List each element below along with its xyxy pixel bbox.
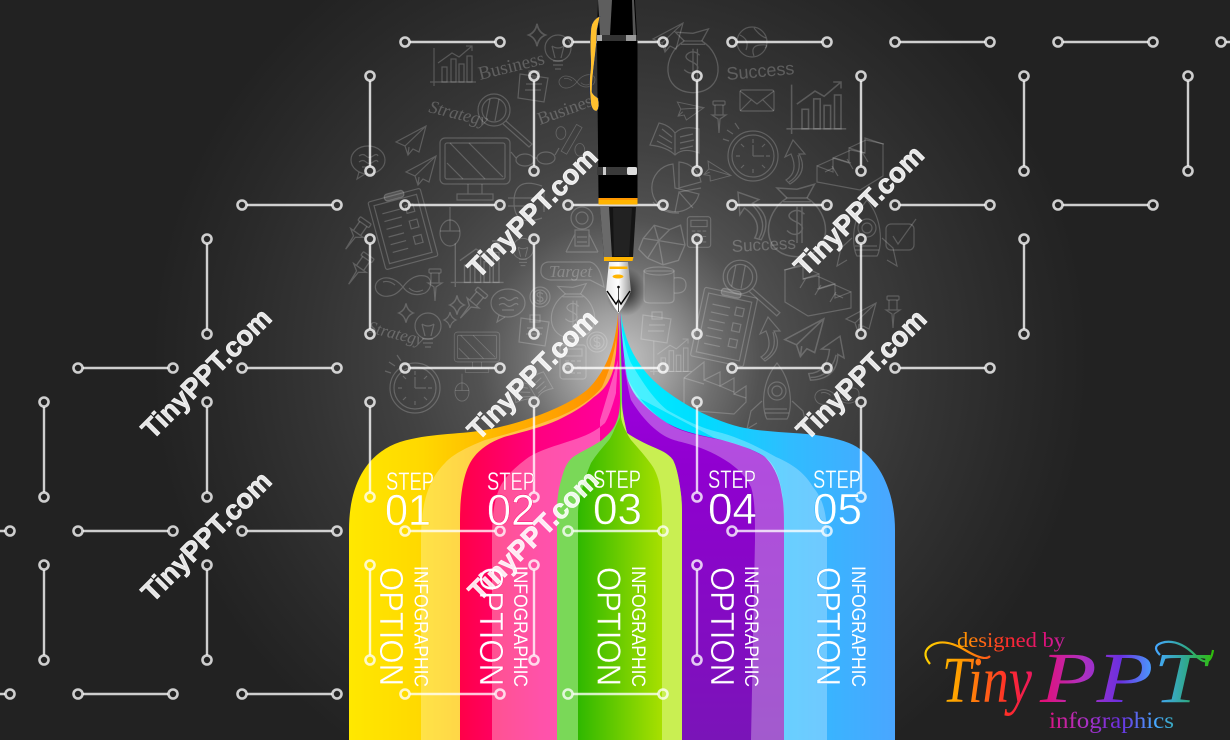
- watermarks: TinyPPT.com: [135, 302, 278, 445]
- pen grip: [600, 207, 636, 257]
- doodle sketch icons: Business: [476, 48, 547, 85]
- pen barrel: [597, 41, 638, 198]
- option 02 text: INFOGRAPHIC: [509, 566, 531, 687]
- option 01 text: [373, 566, 432, 687]
- barrel ring: [597, 167, 637, 175]
- watermarks: TinyPPT.com: [461, 303, 604, 446]
- step 05 label: STEP: [813, 466, 861, 494]
- gold band: [598, 198, 638, 204]
- step 01 label: 01: [385, 486, 431, 535]
- option 05 text: [810, 566, 869, 687]
- option 03 text: OPTION: [590, 567, 628, 686]
- step 04 label: STEP: [708, 466, 756, 494]
- green right highlight: [621, 400, 682, 740]
- option 04 text: [704, 566, 762, 687]
- pen cap top: [597, 0, 637, 35]
- step 05 label: 05: [813, 485, 862, 534]
- option 03 text: INFOGRAPHIC: [627, 566, 649, 687]
- gold ring: [604, 257, 634, 261]
- step 03 label: STEP: [593, 466, 641, 494]
- band: step 05 blue: [621, 313, 895, 740]
- option 02 text: [473, 566, 531, 687]
- option 04 text: INFOGRAPHIC: [740, 566, 762, 687]
- logo: designed by TinyPPT infographics: [925, 628, 1213, 733]
- watermarks: TinyPPT.com: [461, 141, 604, 284]
- logo: designed by TinyPPT infographics: designed by: [957, 628, 1066, 652]
- rainbow ink bands: [349, 313, 895, 740]
- doodle sketch icons: [339, 23, 916, 429]
- logo flourishes: [925, 642, 1213, 664]
- option 01 text: OPTION: [373, 567, 410, 686]
- watermarks: TinyPPT.com: [787, 139, 930, 282]
- logo: designed by TinyPPT infographics: PPT: [1039, 638, 1211, 718]
- light overlay: purple: [622, 350, 784, 740]
- doodle sketch icons: Target: [549, 262, 593, 281]
- doodle sketch icons: Strategy: [366, 317, 426, 350]
- band: step 03 green: [557, 313, 682, 740]
- option 05 text: OPTION: [810, 567, 847, 686]
- light overlay: blue: [622, 330, 827, 740]
- watermarks: TinyPPT.com: [462, 464, 605, 607]
- band: step 02 pink: [460, 313, 620, 740]
- logo: designed by TinyPPT infographics: Tiny: [942, 644, 1033, 717]
- option 01 text: INFOGRAPHIC: [410, 566, 432, 687]
- watermarks: TinyPPT.com: [135, 465, 278, 608]
- option 02 text: OPTION: [473, 567, 510, 686]
- doodle sketch icons: Strategy: [427, 96, 490, 130]
- logo: designed by TinyPPT infographics: infographics: [1049, 708, 1174, 733]
- step 03 label: 03: [593, 485, 642, 534]
- watermarks: TinyPPT.com: [790, 303, 933, 446]
- band: step 01 yellow: [349, 313, 618, 740]
- doodle sketch icons: Success: [726, 58, 795, 84]
- band: step 04 purple: [620, 313, 784, 740]
- step 02 label: 02: [487, 486, 535, 535]
- light overlay: yellow: [421, 340, 616, 740]
- icon: fountain pen: [590, 0, 646, 316]
- option 05 text: INFOGRAPHIC: [847, 566, 869, 687]
- nib shadow: [606, 268, 646, 316]
- nib: [606, 262, 631, 313]
- pen clip: [590, 16, 600, 111]
- light overlay: pink: [492, 360, 618, 740]
- step 02 label: STEP: [487, 468, 535, 496]
- step labels: [385, 466, 862, 535]
- doodle sketch icons: Success: [731, 234, 796, 256]
- step 01 label: STEP: [386, 468, 434, 496]
- step 04 label: 04: [708, 485, 757, 534]
- watermarks: [135, 139, 933, 608]
- vertical option labels: [373, 566, 869, 687]
- green core: [578, 380, 662, 740]
- option 03 text: [590, 566, 649, 687]
- doodle sketch icons: Business: [535, 88, 602, 129]
- option 04 text: OPTION: [704, 567, 741, 686]
